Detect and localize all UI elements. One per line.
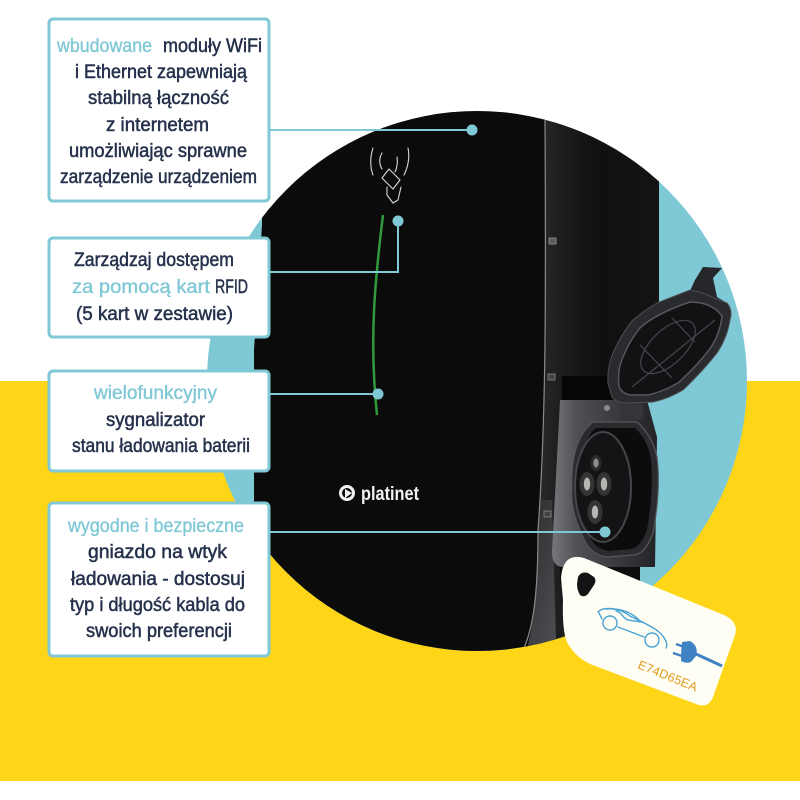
side marker top xyxy=(549,238,556,244)
side panel xyxy=(520,100,659,660)
card code: E74D65EA xyxy=(636,658,700,695)
socket recess shadow xyxy=(562,376,617,402)
panel: WiFi and Ethernet: i Ethernet zapewniają xyxy=(75,62,247,83)
socket outer ring xyxy=(572,422,658,557)
panel: status indicator: stanu ładowania baterii xyxy=(72,436,250,457)
yellow background band xyxy=(0,381,800,781)
panel: RFID access: Zarządzaj dostępem xyxy=(74,250,234,271)
front panel xyxy=(254,100,545,660)
panel: charging socket: swoich preferencji xyxy=(86,621,232,642)
panel: WiFi and Ethernet: wbudowane xyxy=(56,36,152,57)
lower side reflection xyxy=(524,500,556,647)
RFID key card xyxy=(561,557,736,705)
card body xyxy=(561,557,736,705)
teal circle xyxy=(207,111,747,651)
plug prongs xyxy=(673,644,684,656)
logo play icon xyxy=(340,486,354,500)
lid outer xyxy=(608,290,731,403)
lid ribs xyxy=(632,311,715,387)
panel: WiFi and Ethernet: umożliwiając sprawne xyxy=(69,141,247,162)
panel: WiFi and Ethernet: moduły WiFi xyxy=(163,36,262,57)
panel: charging socket: wygodne i bezpieczne xyxy=(67,516,244,537)
card hole xyxy=(577,572,596,596)
panel: charging socket: typ i długość kabla do xyxy=(70,595,245,616)
open lid xyxy=(608,267,731,403)
plug cable xyxy=(696,654,722,666)
black area below plate xyxy=(560,560,640,584)
connector: socket callout xyxy=(270,526,610,538)
socket pin right xyxy=(596,472,612,496)
icon: plug xyxy=(673,641,722,666)
panel: WiFi and Ethernet: stabilną łączność xyxy=(88,88,229,109)
socket assembly xyxy=(552,267,731,584)
socket hinge xyxy=(604,403,643,419)
socket pin left xyxy=(580,472,594,496)
panel: WiFi and Ethernet xyxy=(49,19,269,201)
socket back plate xyxy=(552,400,657,567)
connector: WiFi callout xyxy=(270,124,478,136)
panel: status indicator xyxy=(49,371,269,471)
icon: car xyxy=(598,609,667,648)
panel: charging socket: gniazdo na wtyk xyxy=(88,542,228,563)
icon: RFID card reader xyxy=(371,148,409,203)
panel: RFID access xyxy=(49,238,269,337)
logo wordmark: platinet xyxy=(361,484,420,505)
panel: status indicator: wielofunkcyjny xyxy=(93,383,218,404)
socket pin bottom xyxy=(588,500,602,524)
panel: charging socket: ładowania - dostosuj xyxy=(71,569,245,590)
panel: RFID access: RFID xyxy=(215,277,248,298)
panel: status indicator: sygnalizator xyxy=(106,410,206,431)
panel: WiFi and Ethernet: zarządzenie urządzeniem xyxy=(60,167,257,188)
panel: WiFi and Ethernet: z internetem xyxy=(106,115,209,136)
lid tab xyxy=(690,267,727,303)
brand logo xyxy=(340,484,420,505)
panel: RFID access: za pomocą kart xyxy=(72,277,211,298)
panel seam xyxy=(524,120,545,648)
panel: RFID access: (5 kart w zestawie) xyxy=(76,304,233,325)
side marker bottom xyxy=(544,511,551,517)
panel: charging socket xyxy=(49,503,269,656)
socket inlet xyxy=(575,432,631,542)
connector: RFID callout xyxy=(270,216,404,272)
charger body xyxy=(254,100,659,660)
connector: status callout xyxy=(270,388,384,400)
green status LED strip xyxy=(373,215,383,415)
lid inner xyxy=(618,302,722,395)
side marker middle xyxy=(548,374,555,380)
socket inner cavity xyxy=(578,428,652,551)
plug body xyxy=(681,641,697,663)
socket pin top xyxy=(590,455,602,471)
